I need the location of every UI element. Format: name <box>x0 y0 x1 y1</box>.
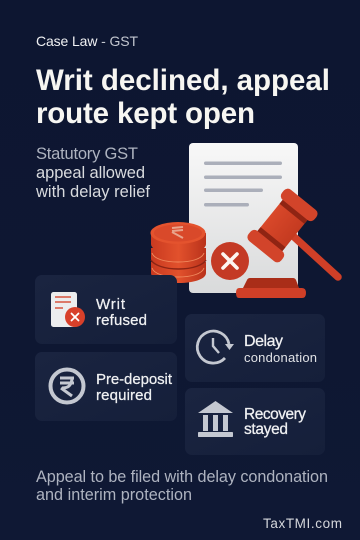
title <box>36 64 330 130</box>
label <box>244 406 306 438</box>
card: pre-deposit required <box>35 352 177 421</box>
title: Writ declined, appeal <box>36 64 330 97</box>
eyebrow: case law label: Case Law - GST <box>36 33 138 49</box>
title: route kept open <box>36 97 255 130</box>
label <box>96 296 147 329</box>
footer note <box>36 468 328 504</box>
gavel <box>245 187 338 277</box>
subtitle: appeal allowed <box>36 164 145 182</box>
card: delay condonation: condonation <box>244 350 317 365</box>
coin stack <box>150 222 206 283</box>
label: Delay <box>244 333 283 350</box>
icon: document with cross <box>51 292 85 327</box>
icon: rupee <box>50 370 84 402</box>
label: Pre-deposit <box>96 371 173 388</box>
document <box>189 143 298 293</box>
footer note: Appeal to be filed with delay condonation <box>36 468 328 486</box>
label: required <box>96 387 152 404</box>
card: writ refused <box>35 275 177 344</box>
gavel sound block <box>236 278 306 298</box>
subtitle: Statutory GST <box>36 145 138 163</box>
footer note: and interim protection <box>36 486 192 504</box>
label: Recovery <box>244 406 306 423</box>
subtitle <box>35 145 150 201</box>
subtitle: with delay relief <box>35 183 150 201</box>
illustration: document, coins, gavel <box>150 143 338 298</box>
card: recovery stayed <box>185 388 325 455</box>
brand: TaxTMI.com: TaxTMI.com <box>263 516 342 531</box>
label <box>96 371 173 404</box>
rejection mark <box>211 242 249 280</box>
label: refused <box>96 312 147 329</box>
icon: bank <box>198 401 233 437</box>
icon: clock <box>197 331 234 363</box>
label: stayed <box>244 421 288 438</box>
card: delay condonation <box>185 314 325 382</box>
label: Writ <box>96 296 126 313</box>
